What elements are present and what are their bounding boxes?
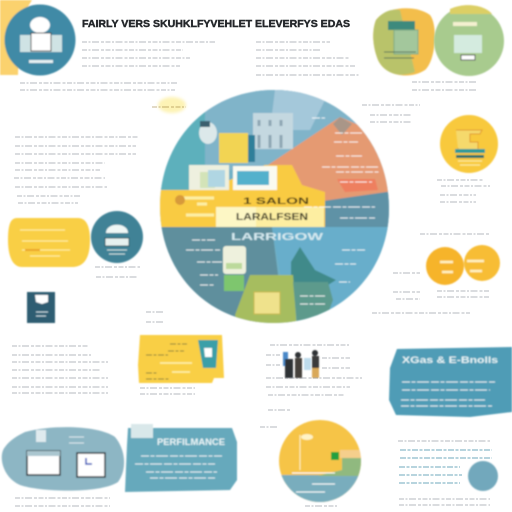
panel: teal right panel	[389, 347, 512, 417]
segment: orange wedge	[268, 117, 400, 202]
text block: under top-right circles	[412, 82, 476, 90]
icon: yellow coin badge	[440, 115, 498, 173]
panel: teal performance panel: PERFILMANCE	[157, 437, 225, 447]
text block: around people	[266, 345, 362, 410]
segment: lower right	[290, 226, 388, 309]
building	[253, 113, 293, 149]
text block: under teal circle	[95, 267, 140, 277]
icon: top-left teal circle with computer	[0, 0, 76, 76]
text block: under yellow badge	[437, 180, 490, 202]
text block: above orange badges	[420, 233, 490, 235]
heading: main circle title: LARALFSEN	[236, 212, 308, 223]
heading: main circle title: LARRIGOW	[231, 232, 324, 243]
panel: oval with windows	[2, 427, 124, 491]
segment: top	[205, 90, 352, 170]
panel: teal right panel: XGas & E-Bnolls	[402, 355, 498, 366]
segment: lower left	[161, 226, 278, 317]
text block: bottom left	[15, 498, 110, 506]
text block: short note	[146, 312, 165, 322]
document	[223, 246, 246, 274]
panel: teal performance panel	[125, 424, 237, 492]
text block: right of circle lower	[372, 273, 470, 313]
text block: lower left	[12, 346, 108, 393]
folder	[219, 133, 248, 163]
windows	[189, 165, 229, 190]
segment: bottom green	[235, 275, 297, 330]
title: FAIRLY VERS SKUHKLFYVEHLET ELEVERFYS EDAS	[82, 18, 350, 30]
icon: yellow landscape circle	[276, 420, 366, 505]
icon: teal circle with monitor	[91, 211, 143, 263]
icon: dark card	[27, 292, 55, 323]
stack icon	[199, 122, 217, 144]
callout: small yellow note	[152, 97, 186, 113]
text block: intro left	[20, 42, 215, 90]
icon: top-right olive and orange badge	[373, 8, 435, 75]
lines in segments	[186, 240, 365, 304]
text block: lower right list	[399, 450, 492, 505]
heading: main circle title: 1 SALON	[243, 196, 309, 206]
panel: yellow card	[138, 335, 224, 383]
text block: under orange badges	[437, 291, 490, 297]
icon: blue circle	[468, 461, 498, 491]
segment: dark right band	[324, 192, 390, 228]
text block: intro right	[256, 42, 360, 75]
icon: twin orange badges	[426, 245, 500, 285]
chart: main circle diagram	[159, 89, 390, 324]
text block: left column	[14, 137, 138, 203]
heading: main circle title	[231, 196, 324, 243]
icon: top-right green badge	[434, 5, 504, 76]
illustration: three people	[283, 350, 319, 378]
text block: right of main circle	[362, 105, 420, 122]
text block: under yellow circle	[260, 427, 338, 506]
text block: under yellow card	[140, 388, 195, 394]
text block: right of yellow circle top	[398, 440, 490, 442]
segment: dark triangle	[290, 247, 336, 285]
icon: yellow pill callout	[8, 218, 90, 267]
segment: yellow band	[160, 165, 325, 227]
